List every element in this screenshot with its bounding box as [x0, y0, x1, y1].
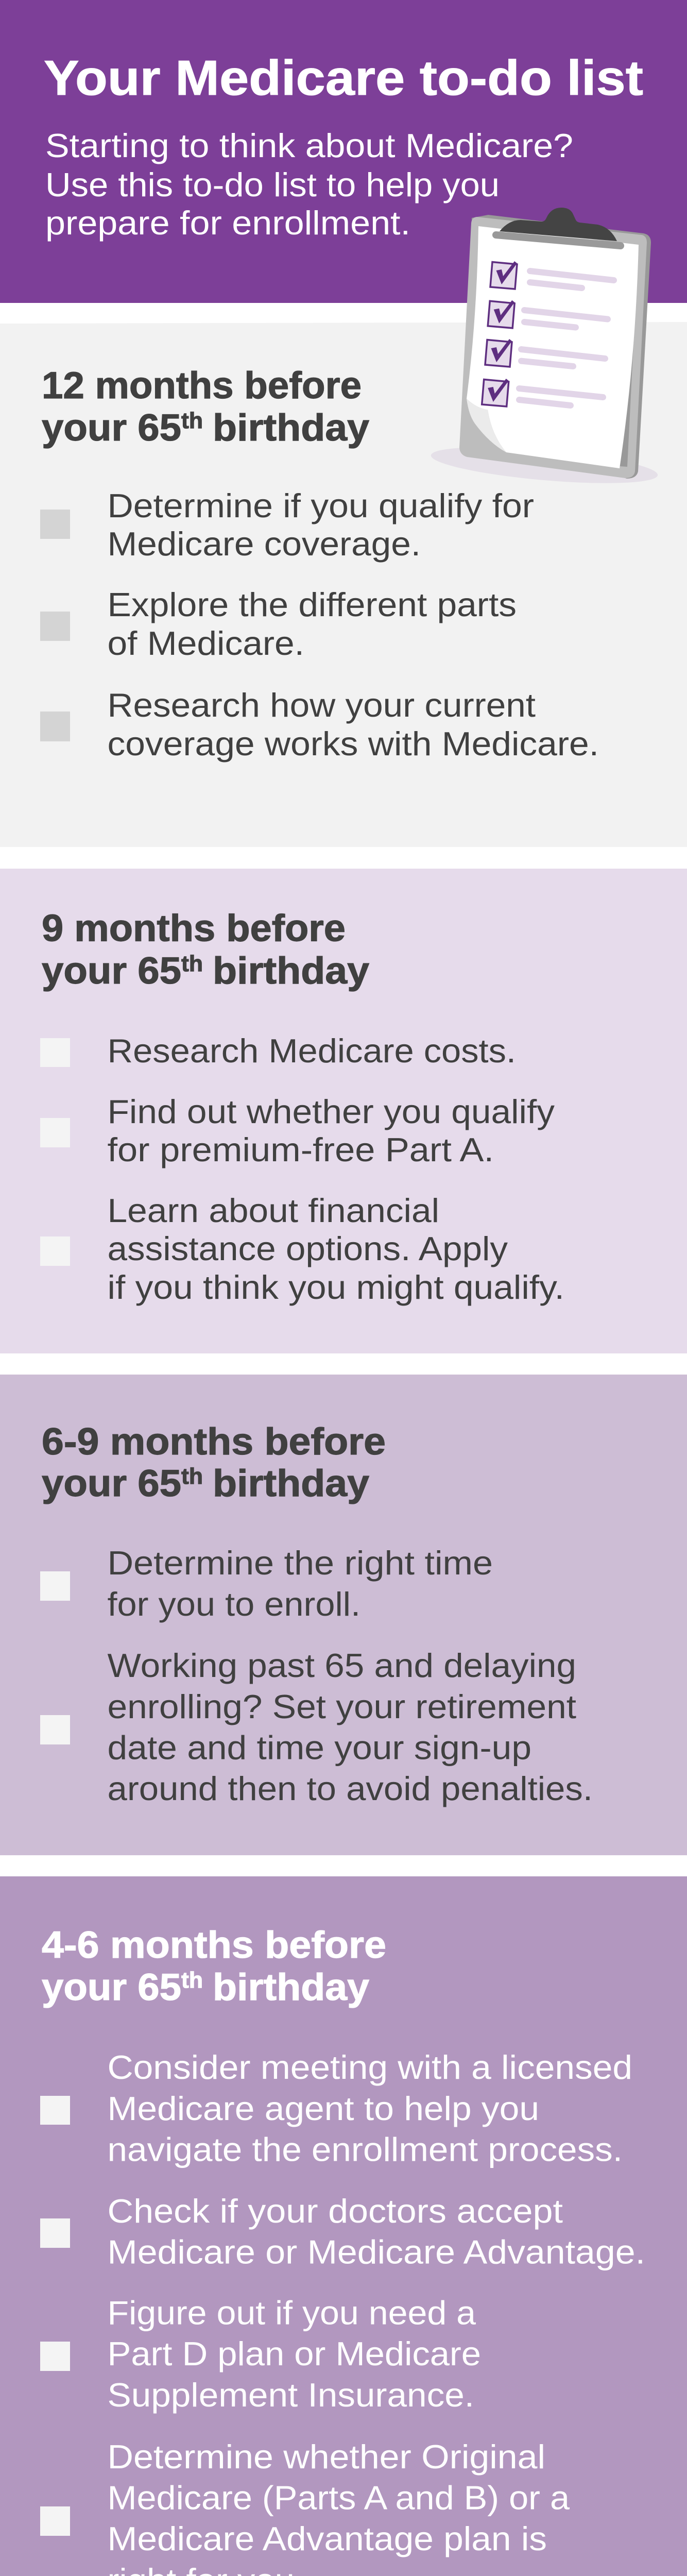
- heading: 4-6 months: [42, 1924, 386, 2008]
- heading: 9 months: birthday: [213, 950, 369, 992]
- heading: 9 months: th: [181, 951, 203, 976]
- intro text: [45, 127, 573, 242]
- checklist item: financial assistance: if you think you might qualify.: [107, 1268, 564, 1306]
- clipboard shadow: [430, 440, 659, 490]
- checklist item: doctors: Check if your doctors accept: [107, 2192, 563, 2230]
- panel: header: [0, 0, 687, 303]
- checklist item: right time: Determine the right time: [107, 1544, 493, 1582]
- heading: 6-9 months: your 65: [42, 1463, 181, 1504]
- checklist item: Part D: [40, 2294, 481, 2414]
- checklist item: Original vs Advantage: Determine whether Original: [107, 2438, 545, 2476]
- heading: 4-6 months: your 65: [42, 1967, 181, 2008]
- heading: 9 months: your 65: [42, 950, 181, 992]
- checklist item: financial assistance: [40, 1192, 564, 1306]
- heading: 12 months: th: [181, 408, 203, 433]
- heading: 9 months: [42, 908, 369, 992]
- checklist item: Part D: Figure out if you need a: [107, 2294, 476, 2332]
- clipboard board: [459, 215, 651, 479]
- title: Your Medicare to-do list: [44, 50, 643, 106]
- checklist item: working past 65: date and time your sign-up: [107, 1729, 531, 1766]
- checklist item: licensed agent: Consider meeting with a licensed: [107, 2048, 632, 2086]
- checklist item: qualify: Determine if you qualify for: [107, 487, 534, 524]
- checklist item: financial assistance: assistance options. Apply: [107, 1230, 508, 1267]
- checklist item: current coverage: Research how your current: [107, 686, 536, 724]
- clipboard row 4: [482, 379, 603, 406]
- heading: 6-9 months: [42, 1421, 386, 1504]
- icon: clipboard: [430, 208, 659, 490]
- checklist item: working past 65: [40, 1647, 593, 1807]
- intro text: prepare for enrollment.: [45, 204, 410, 242]
- checklist item: current coverage: [40, 686, 599, 762]
- heading: 6-9 months: 6-9 months before: [42, 1421, 386, 1463]
- checklist item: Original vs Advantage: Medicare (Parts A and B) or a: [107, 2479, 570, 2516]
- checklist item: licensed agent: Medicare agent to help you: [107, 2090, 539, 2127]
- clipboard row 1: [490, 261, 614, 289]
- heading: 6-9 months: birthday: [213, 1463, 369, 1504]
- intro text: Use this to-do list to help you: [45, 166, 500, 204]
- heading: 12 months: [42, 365, 369, 449]
- clipboard row 2: [488, 300, 608, 328]
- heading: 9 months: 9 months before: [42, 908, 346, 949]
- checklist item: doctors: Medicare or Medicare Advantage.: [107, 2233, 645, 2271]
- checklist item: Original vs Advantage: [40, 2438, 570, 2576]
- checklist item: right time: for you to enroll.: [107, 1585, 360, 1623]
- checklist item: qualify: [40, 487, 534, 563]
- heading: 6-9 months: th: [181, 1464, 203, 1489]
- intro text: Starting to think about Medicare?: [45, 127, 573, 164]
- heading: 12 months: your 65: [42, 407, 181, 449]
- checklist item: licensed agent: [40, 2048, 632, 2168]
- heading: 4-6 months: birthday: [213, 1967, 369, 2008]
- panel: 4-6 months before: [0, 1876, 687, 2576]
- checklist item: premium-free Part A: [40, 1093, 555, 1168]
- heading: 4-6 months: 4-6 months before: [42, 1924, 386, 1966]
- heading: 12 months: 12 months before: [42, 365, 362, 406]
- checklist item: doctors: [40, 2192, 645, 2271]
- checklist item: right time: [40, 1544, 493, 1623]
- heading: 12 months: birthday: [213, 407, 369, 449]
- clipboard paper: [467, 226, 639, 468]
- checklist item: Part D: Part D plan or Medicare: [107, 2335, 481, 2372]
- clipboard row 3: [485, 339, 605, 367]
- panel: 12 months before: [0, 322, 687, 847]
- checklist item: premium-free Part A: Find out whether you qualify: [107, 1093, 555, 1130]
- checklist item: licensed agent: navigate the enrollment process.: [107, 2131, 623, 2168]
- checklist item: financial assistance: Learn about financial: [107, 1192, 439, 1229]
- checklist item: explore parts: of Medicare.: [107, 624, 304, 662]
- checklist item: working past 65: Working past 65 and delaying: [107, 1647, 576, 1684]
- checklist item: premium-free Part A: for premium-free Part A.: [107, 1131, 494, 1168]
- checklist item: explore parts: [40, 586, 517, 662]
- checklist item: qualify: Medicare coverage.: [107, 525, 421, 563]
- heading: 4-6 months: th: [181, 1968, 203, 1993]
- clipboard clip: [496, 208, 621, 246]
- checklist item: working past 65: enrolling? Set your retirement: [107, 1688, 576, 1725]
- panel: 9 months before: [0, 869, 687, 1353]
- checklist item: costs: Research Medicare costs.: [107, 1032, 516, 1070]
- checklist item: Original vs Advantage: Medicare Advantage plan is: [107, 2520, 547, 2557]
- checklist item: working past 65: around then to avoid penalties.: [107, 1770, 593, 1807]
- checklist item: Part D: Supplement Insurance.: [107, 2376, 474, 2414]
- panel: 6-9 months before: [0, 1375, 687, 1855]
- checklist item: explore parts: Explore the different parts: [107, 586, 517, 623]
- checklist item: current coverage: coverage works with Medicare.: [107, 725, 599, 762]
